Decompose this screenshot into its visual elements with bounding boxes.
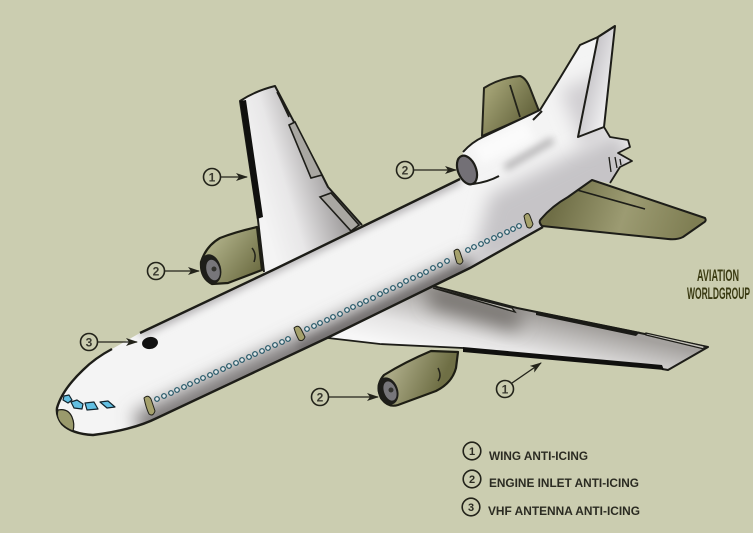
callout 2: lower engine: 2 [317,390,324,404]
left wing [240,86,362,274]
legend [462,442,640,518]
callout 3: VHF antenna: 3 [86,336,93,350]
callout 1: upper wing [204,168,247,186]
callout 1: lower wing: 1 [502,382,509,396]
legend item 3: 3 [468,502,474,514]
legend item 3 [462,498,640,518]
callout 2: left engine: 2 [153,264,160,278]
far-side horizontal stabilizer [482,76,539,136]
center engine inlet [453,153,499,187]
callout 2: center engine: 2 [402,164,409,178]
legend item 1 [463,442,588,463]
nose radome [57,410,74,431]
cockpit windows [63,395,115,410]
legend item 3: VHF ANTENNA ANTI-ICING [488,506,640,518]
callout 2: center engine [396,162,456,178]
right wing [328,286,709,371]
doors [144,214,533,415]
legend item 1: 1 [469,446,475,458]
near-side horizontal stabilizer [540,180,706,239]
legend item 2 [463,470,639,490]
vertical tail fin rudder [578,26,615,137]
VHF antenna [141,336,159,350]
callout 1: upper wing: 1 [209,170,216,184]
fuselage [57,26,640,435]
callout 2: left engine [148,262,199,280]
watermark: Aviation Worldgroup [687,267,750,303]
passenger windows [155,224,521,401]
callout 1: lower wing [496,363,541,398]
lower engine [374,351,458,408]
fuselage outlines [140,179,460,333]
legend item 2: 2 [469,474,475,486]
left engine [197,227,262,286]
callout 3: VHF antenna [80,334,137,350]
legend item 2: ENGINE INLET ANTI-ICING [489,478,639,490]
callout 2: lower engine [312,388,378,406]
legend item 1: WING ANTI-ICING [489,451,588,463]
